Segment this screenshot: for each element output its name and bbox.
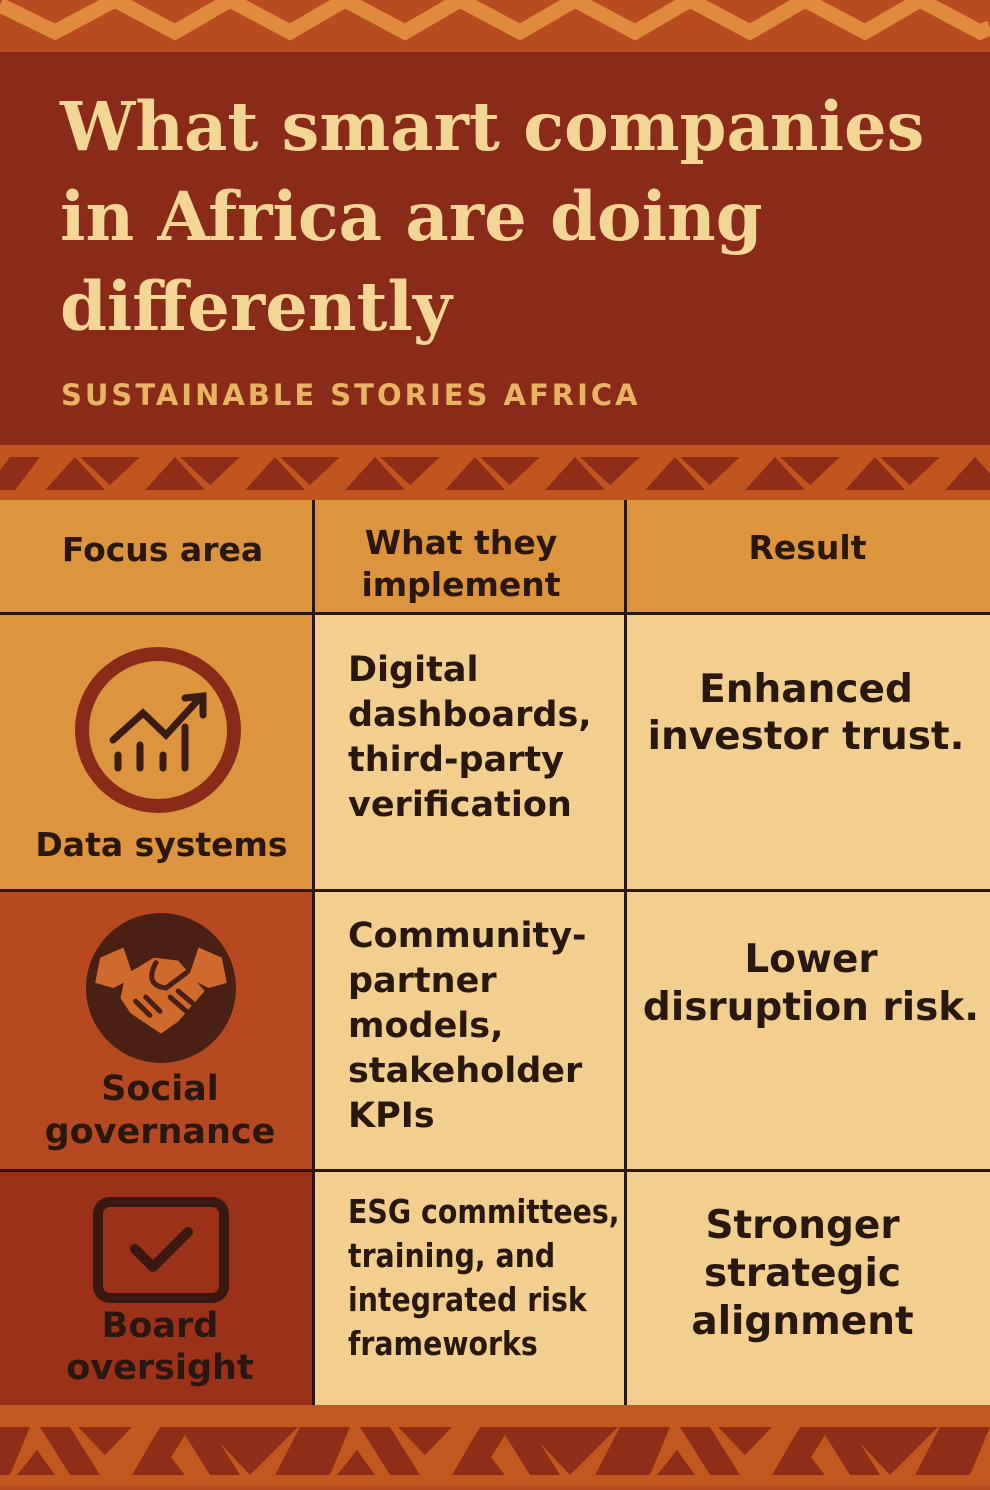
header: focus area: Focus area [62, 530, 263, 569]
row 2 implement: partner [348, 961, 497, 1001]
row 1 implement: verification [348, 785, 572, 825]
row 1 implement [348, 650, 592, 825]
bottom pattern band [0, 1405, 990, 1486]
row 1 result [648, 667, 964, 759]
row 3 result: alignment [691, 1299, 914, 1344]
subtitle: SUSTAINABLE STORIES AFRICA [61, 378, 641, 412]
header: what they implement [361, 523, 561, 604]
row 2 implement: Community- [348, 916, 587, 956]
row 3 result: Stronger [705, 1203, 900, 1248]
row 3 implement: ESG committees, [348, 1192, 620, 1231]
row 1 implement: third-party [348, 740, 564, 780]
row 3 focus: board oversight [66, 1197, 254, 1388]
icon: chart [75, 647, 241, 813]
row 3 result [691, 1203, 914, 1344]
row 2 implement [348, 916, 587, 1136]
row 3 focus: board oversight: oversight [66, 1348, 254, 1388]
icon: checkbox [93, 1197, 229, 1303]
row 2 focus: social governance [45, 913, 275, 1152]
row 1 result: Enhanced [699, 667, 913, 712]
row 3 focus: board oversight: Board [102, 1306, 218, 1346]
row 3 implement: integrated risk [348, 1280, 587, 1319]
header: what they implement: What they [365, 523, 557, 562]
row 1 focus: data systems [35, 647, 288, 864]
row 3 implement [348, 1192, 620, 1363]
row 2 focus: social governance: Social [101, 1069, 219, 1109]
row 2 implement: KPIs [348, 1096, 435, 1136]
row 2 focus: social governance: governance [45, 1112, 275, 1152]
row 3 implement: training, and [348, 1236, 555, 1275]
row 3 implement: frameworks [348, 1324, 538, 1363]
row 1 result: investor trust. [648, 714, 964, 759]
top pattern band [0, 0, 990, 52]
row 2 result: disruption risk. [643, 985, 979, 1030]
row 1 implement: Digital [348, 650, 478, 690]
title: What smart companies in Africa are doing differently [60, 87, 924, 346]
header: result: Result [748, 528, 866, 567]
table [0, 500, 990, 1405]
row 3 result: strategic [704, 1251, 901, 1296]
row 1 implement: dashboards, [348, 695, 592, 735]
row 2 implement: stakeholder [348, 1051, 582, 1091]
row 2 result [643, 937, 979, 1030]
middle pattern band [0, 445, 990, 500]
header: what they implement: implement [361, 565, 561, 604]
icon: handshake [86, 913, 236, 1063]
row 1 focus: data systems: Data systems [35, 825, 288, 864]
row 2 result: Lower [744, 937, 878, 982]
title panel [0, 52, 990, 445]
row 2 implement: models, [348, 1006, 503, 1046]
